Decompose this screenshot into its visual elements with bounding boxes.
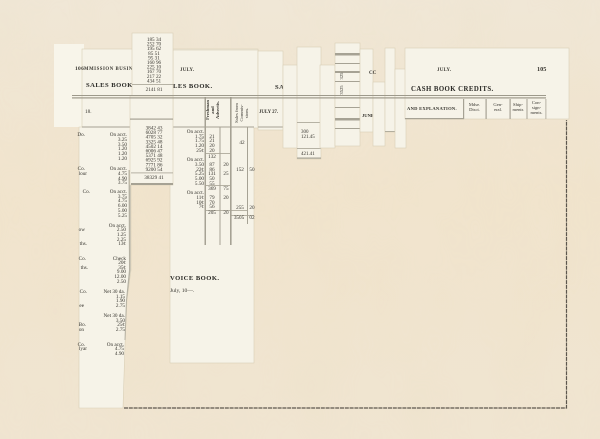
upper figures: 225 10 [147, 65, 162, 71]
left column amounts: Co. [80, 289, 87, 295]
left column amounts: Bo. [79, 322, 86, 328]
left column amounts: 1.20 [118, 156, 127, 162]
lower figures: 38329 41 [144, 175, 164, 181]
column headings: Gen- [493, 102, 503, 107]
panel: cash book credits header [405, 48, 569, 119]
invoice amounts: On acct. [187, 157, 204, 163]
invoice amounts: 20 [209, 143, 215, 149]
total 421.41: 421.41 [301, 152, 315, 157]
left column amounts: Do. [77, 132, 85, 138]
left column amounts: 5.25 [118, 213, 127, 219]
panel: top number column clipping [130, 33, 173, 185]
invoice amounts: On acct. [187, 190, 204, 196]
invoice amounts [187, 129, 255, 221]
lower figures: 9200 54 [146, 167, 163, 173]
left column amounts: 3.50 [116, 318, 125, 324]
table rules [170, 97, 254, 245]
invoice amounts: 152 [236, 167, 244, 173]
rotated fragments: 3525 [339, 85, 344, 95]
heading: cash book credits: CASH BOOK CREDITS. [411, 86, 494, 93]
left column amounts: 3.75 [118, 194, 127, 200]
left column amounts: 9.00 [117, 269, 126, 275]
label: July: JULY. [437, 68, 451, 73]
left column amounts: 4.90 [118, 176, 127, 182]
invoice amounts: 50 [249, 167, 255, 173]
column rules [405, 99, 546, 119]
left column amounts: ow [79, 227, 85, 233]
invoice amounts: 205 [208, 210, 216, 216]
invoice amounts: 7¢ [199, 204, 204, 210]
upper figures: 195 62 [147, 46, 162, 52]
left column amounts: Co. [78, 166, 85, 172]
left column amounts: Co. [83, 189, 90, 195]
lower figures: 6925 92 [146, 158, 163, 164]
lower figures: 6006 47 [146, 148, 163, 154]
upper figures: 185 34 [147, 37, 162, 43]
collage of ledger clippings [54, 33, 569, 408]
panel: narrow clippings group [258, 43, 406, 159]
lower figures: 3842 43 [146, 126, 163, 132]
column headings: sign- [532, 105, 542, 110]
invoice amounts: 1.75 [195, 134, 204, 140]
upper figures: 252 70 [147, 42, 162, 48]
invoice amounts: 20 [209, 148, 215, 154]
left column amounts: 3.50 [118, 142, 127, 148]
invoice amounts: 1.75 [195, 138, 204, 144]
left column amounts: Co. [79, 256, 86, 262]
left column amounts: 25¢ [117, 322, 125, 328]
invoice amounts: 20 [249, 205, 255, 211]
upper figures: 2141 81 [146, 87, 163, 93]
left column amounts: lour [79, 171, 87, 177]
lower figures: 6028 77 [146, 130, 163, 136]
column headings: ments. [530, 110, 543, 115]
invoice amounts: 369 [208, 186, 216, 192]
left column amounts: Check [113, 256, 126, 262]
upper figures: 217 22 [147, 74, 162, 80]
left column amounts: 5.00 [118, 208, 127, 214]
lower figures: 5371 48 [146, 153, 163, 159]
column headings: ments [513, 107, 524, 112]
left column amounts: 20¢ [118, 260, 126, 266]
left column amounts: 6.00 [118, 203, 127, 209]
left column amounts: On acct. [107, 342, 124, 348]
figures 300 and 121.45: 300 [301, 130, 309, 135]
rotated column headings: Advertis. [215, 101, 220, 119]
text fragment: CC: CC [369, 71, 377, 76]
invoice amounts: 20 [223, 210, 229, 216]
invoice amounts: 131 [208, 171, 216, 177]
stitched margin line [124, 120, 566, 408]
left column amounts: 4.75 [118, 171, 127, 177]
invoice amounts: 25¢ [196, 148, 204, 154]
text fragment: June: JUNE [362, 113, 374, 118]
left column amounts: On acct. [110, 166, 127, 172]
rotated fragments [339, 72, 344, 95]
text fragment: July 27: JULY 27. [259, 110, 278, 115]
upper figures: 167 70 [147, 69, 162, 75]
invoice amounts: 50 [209, 176, 215, 182]
left column amounts: ths. [81, 265, 88, 271]
left column amounts: 4.75 [115, 346, 124, 352]
invoice amounts: 55 [209, 181, 215, 187]
figures 300 and 121.45 [301, 130, 315, 140]
column headings: Con- [532, 100, 542, 105]
left column amounts: 1.20 [118, 151, 127, 157]
heading: sales book: SALES BOOK. [86, 82, 135, 89]
left column amounts: Co. [78, 342, 85, 348]
left column amounts [77, 132, 127, 357]
panel: commission and sales book header: MMISSION BUSINE [84, 67, 137, 72]
invoice amounts: 79 [209, 195, 215, 201]
invoice amounts: 5.50 [195, 181, 204, 187]
invoice amounts: 20 [223, 162, 229, 168]
label: date 18: 18. [85, 109, 91, 115]
left column amounts: 12.00 [114, 274, 126, 280]
panel: far-left blank strip [54, 44, 84, 127]
left column amounts: 35¢ [118, 265, 126, 271]
label: and explanation: AND EXPLANATION. [407, 106, 457, 111]
panel: commission and sales book header [75, 49, 258, 128]
rotated column headings: Commis- [239, 104, 244, 122]
invoice amounts: 75 [223, 186, 229, 192]
lower figures: 4705 32 [146, 135, 163, 141]
column headings: Ship- [513, 102, 523, 107]
upper figures: 85 51 [148, 51, 160, 57]
invoice amounts: 10¢ [196, 200, 204, 206]
left column amounts: 13¢ [118, 241, 126, 247]
left column amounts: lyar [79, 346, 87, 352]
invoice amounts: 3505 [234, 215, 245, 221]
invoice amounts: 87 [209, 162, 215, 168]
left column amounts: on [79, 327, 84, 333]
left column amounts: 2.25 [117, 237, 126, 243]
invoice amounts: 02 [249, 215, 255, 221]
left column amounts: ee [79, 303, 85, 309]
left column amounts: Net 30 da. [104, 289, 125, 295]
upper figures: 160 96 [147, 60, 162, 66]
page number: 105 [537, 66, 546, 73]
upper figures: 434 51 [147, 78, 162, 84]
heading: invoice book: VOICE BOOK. [170, 275, 220, 282]
left column amounts: 2.75 [116, 327, 125, 333]
lower figures: 7771 86 [146, 162, 163, 168]
lower figures [144, 126, 164, 181]
invoice amounts: 70 [209, 200, 215, 206]
invoice amounts: 22¢ [196, 167, 204, 173]
left column amounts: 3.25 [118, 137, 127, 143]
left column amounts: ths. [80, 241, 87, 247]
invoice amounts: 20 [223, 195, 229, 201]
rotated column headings [205, 100, 249, 123]
rotated fragments: 325 [339, 72, 344, 79]
rotated column headings: Freshman [205, 100, 210, 120]
invoice amounts: 3.50 [195, 162, 204, 168]
left column amounts: 2.50 [117, 279, 126, 285]
invoice amounts: 21 [209, 138, 215, 144]
panel: invoice book sheet [170, 50, 258, 363]
double header rule [72, 95, 546, 98]
invoice amounts: 21 [209, 134, 215, 140]
column headings: Mdse. [469, 102, 480, 107]
invoice amounts: On acct. [187, 129, 204, 135]
left column amounts: 1.90 [116, 298, 125, 304]
invoice amounts: 5.25 [195, 171, 204, 177]
invoice amounts: 11¢ [196, 195, 204, 201]
upper figures [146, 37, 163, 93]
invoice amounts: 56 [209, 204, 215, 210]
left column amounts: 2.50 [117, 227, 126, 233]
rotated column headings: and [210, 106, 215, 114]
left column amounts: 2.75 [116, 303, 125, 309]
left column amounts: On acct. [110, 132, 127, 138]
heading: sales book fragment: LES BOOK. [173, 83, 213, 90]
invoice amounts: 1.20 [195, 143, 204, 149]
invoice amounts: 25 [223, 171, 229, 177]
label: July 10: July, 10—. [170, 288, 195, 294]
invoice amounts: 5.00 [195, 176, 204, 182]
left column amounts: 4.75 [118, 198, 127, 204]
lower figures: 3325 48 [146, 139, 163, 145]
label: July: JULY. [180, 68, 194, 73]
invoice amounts: 42 [239, 140, 245, 146]
left column amounts: Net 30 da. [104, 313, 125, 319]
page number and heading: 106 [75, 66, 84, 72]
invoice amounts: 132 [208, 154, 216, 160]
figures 300 and 121.45: 121.45 [301, 135, 315, 140]
lower figures: 4502 14 [146, 144, 163, 150]
left column amounts: On acct. [109, 223, 126, 229]
column headings: eral. [494, 107, 502, 112]
rotated column headings: sions. [244, 108, 249, 118]
left column amounts: 1.15 [116, 294, 125, 300]
left column amounts: 1.25 [117, 232, 126, 238]
left column amounts: 1.20 [118, 146, 127, 152]
rotated column headings: Sales from [234, 103, 239, 123]
invoice amounts: 86 [209, 167, 215, 173]
left column amounts: 3.75 [118, 180, 127, 186]
upper figures: 95 31 [148, 55, 160, 61]
column headings [469, 100, 543, 115]
left column amounts: 4.90 [115, 351, 124, 357]
left column amounts: On acct. [110, 189, 127, 195]
column headings: Disct. [469, 107, 480, 112]
text fragment: SA: SA [275, 84, 284, 91]
invoice amounts: 255 [236, 205, 244, 211]
panel: left column clipping [77, 127, 131, 408]
